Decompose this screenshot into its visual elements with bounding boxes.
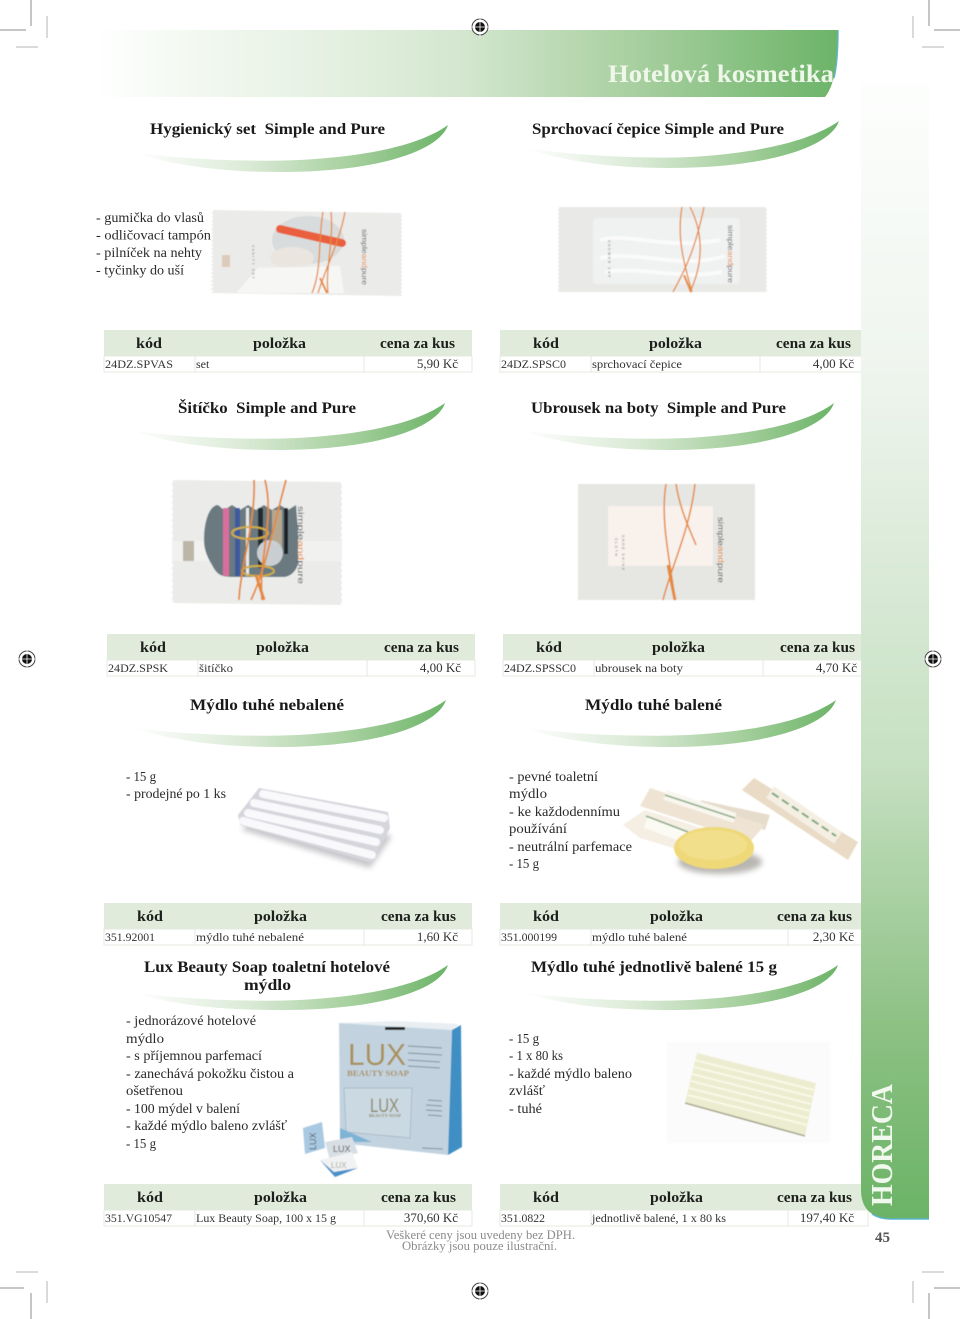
description list: - pilníček na nehty [96,246,202,261]
product photo: shower cap sachet: SHOWER CAP [607,240,611,279]
section: Mýdlo tuhé balené: Mýdlo tuhé balené [585,697,722,714]
product photo: LUX box and soaps: BEAUTY SOAP [369,1113,402,1118]
description list [509,1032,632,1117]
section: Lux Beauty Soap [126,959,462,1177]
section: Ubrousek na boty [520,400,834,600]
section: Mýdlo tuhé jednotlivě balené: Mýdlo tuhé jednotlivě balené 15 g [531,959,777,976]
table: 351.000199: položka [650,909,704,925]
table: 351.VG10547: cena za kus [381,1190,456,1206]
product photo: LUX box and soaps: LUX [331,1161,347,1170]
description list: mýdlo [126,1032,164,1047]
product photo: sewing kit sachet: simple and pure [296,506,305,585]
section: Mýdlo tuhé nebalené [126,697,446,868]
description list [126,1014,295,1152]
table: 351.92001: kód [137,909,164,925]
description list: - zanechává pokožku čistou a [126,1067,295,1082]
table: 351.000199: 351.000199 [501,930,557,944]
description list: - gumička do vlasů [96,211,204,226]
table: 24DZ.SPSK [107,634,475,676]
table: 24DZ.SPSC0: sprchovací čepice [592,357,682,371]
table: 351.92001: mýdlo tuhé nebalené [196,930,304,944]
table: 24DZ.SPSSC0: 4,70 Kč [816,660,857,675]
section: Sprchovací čepice [523,121,839,292]
table: 24DZ.SPSK: 24DZ.SPSK [108,661,168,675]
product photo: LUX box and soaps: LUX [348,1037,406,1072]
table: 351.0822: kód [533,1190,560,1206]
description list: - tuhé [509,1102,542,1117]
product photo: hygiene set sachet: simple and pure [360,229,367,285]
table: 351.0822: jednotlivě balené, 1 x 80 ks [591,1211,726,1225]
description list: - pevné toaletní [509,770,598,785]
description list: - každé mýdlo baleno [509,1067,632,1082]
table: 351.VG10547: kód [137,1190,164,1206]
table: 351.92001: 1,60 Kč [417,929,458,944]
table: 24DZ.SPSSC0: kód [536,640,563,656]
table: 24DZ.SPVAS: položka [253,336,307,352]
product photo: cream soap bar [667,1042,830,1143]
table: 24DZ.SPVAS: 5,90 Kč [417,356,458,371]
table: 351.0822: 351.0822 [501,1211,545,1225]
description list: - neutrální parfemace [509,840,632,855]
product photo: shoe cloth sachet: simple and pure [716,517,725,584]
table: 24DZ.SPVAS: cena za kus [380,336,455,352]
page header banner [96,30,838,97]
table: 351.000199: mýdlo tuhé balené [592,930,687,944]
table: 351.92001: položka [254,909,308,925]
table: 24DZ.SPSK: položka [256,640,310,656]
product photo: shower cap sachet [558,207,767,292]
section: Lux Beauty Soap: mýdlo [244,977,291,994]
product photo: wrapped soaps [623,778,858,874]
registration mark: right [923,649,943,669]
product photo: LUX box and soaps [303,1021,462,1177]
product photo: LUX box and soaps: LUX [333,1144,351,1154]
footnote: Veškeré ceny jsou uvedeny bez DPH. [386,1227,575,1242]
product photo: shoe cloth sachet [578,484,755,600]
footnote: Obrázky jsou pouze ilustrační. [402,1238,557,1253]
description list [126,770,226,802]
product photo: hygiene set sachet [211,210,402,296]
table: 24DZ.SPSSC0 [503,634,871,676]
product photo: sewing kit sachet [172,480,342,605]
section: Hygienický set [96,121,448,296]
sidebar tab: HORECA [861,82,929,1219]
section: Šitíčko [130,398,445,605]
description list: - s příjemnou parfemací [126,1049,262,1064]
table: 351.0822 [500,1184,868,1226]
table: 24DZ.SPSC0: položka [649,336,703,352]
description list: - 15 g [126,1137,156,1152]
table: 351.0822: položka [650,1190,704,1206]
description list [96,211,211,278]
table: 24DZ.SPSC0 [500,330,868,372]
table: 351.92001: cena za kus [381,909,456,925]
page title: Hotelová kosmetika [608,61,835,88]
section: Mýdlo tuhé jednotlivě balené [509,959,838,1143]
table: 351.000199: kód [533,909,560,925]
table: 24DZ.SPSC0: 24DZ.SPSC0 [501,357,566,371]
registration mark: bottom [470,1281,490,1301]
table: 24DZ.SPSC0: 4,00 Kč [813,356,854,371]
description list: používání [509,822,567,837]
description list: - každé mýdlo baleno zvlášť [126,1119,287,1134]
table: 24DZ.SPVAS: kód [136,336,163,352]
description list: - 15 g [509,857,539,872]
description list: - jednorázové hotelové [126,1014,256,1029]
sidebar tab: HORECA: HORECA [864,1083,899,1206]
table: 351.0822: 197,40 Kč [800,1210,854,1225]
table: 24DZ.SPSK: šitíčko [199,661,233,675]
table: 351.000199: 2,30 Kč [813,929,854,944]
table: 24DZ.SPSSC0: cena za kus [780,640,855,656]
product photo: shoe cloth sachet: SHOE SHINE [621,535,625,572]
registration mark: left [17,649,37,669]
table: 24DZ.SPSC0: cena za kus [776,336,851,352]
table: 351.92001: 351.92001 [105,930,155,944]
section: Mýdlo tuhé nebalené: Mýdlo tuhé nebalené [190,697,344,714]
product photo: LUX box and soaps: LUX [308,1132,318,1150]
description list: - 100 mýdel v balení [126,1102,240,1117]
page number: 45 [875,1230,890,1246]
table: 24DZ.SPVAS [104,330,472,372]
section: Hygienický set: Hygienický set Simple and Pure [150,121,385,138]
table: 351.0822: cena za kus [777,1190,852,1206]
description list: - tyčinky do uší [96,264,184,278]
table: 351.92001 [104,903,472,945]
description list: ošetřenou [126,1084,183,1099]
table: 24DZ.SPSC0: kód [533,336,560,352]
table: 24DZ.SPSK: cena za kus [384,640,459,656]
description list: - ke každodennímu [509,805,620,820]
description list [509,770,632,872]
product photo: shoe cloth sachet: CLOTH [614,538,618,557]
registration mark: top [470,17,490,37]
table: 351.VG10547: 370,60 Kč [404,1210,458,1225]
description list: mýdlo [509,787,547,802]
section: Ubrousek na boty: Ubrousek na boty Simple and Pure [531,400,786,417]
description list: zvlášť [509,1084,545,1099]
section: Mýdlo tuhé balené [509,697,858,874]
table: 24DZ.SPSSC0: 24DZ.SPSSC0 [504,661,576,675]
table: 24DZ.SPVAS: set [196,357,210,371]
product photo: shower cap sachet: simple and pure [726,225,733,283]
table: 24DZ.SPSK: kód [140,640,167,656]
description list: - 15 g [509,1032,539,1047]
section: Lux Beauty Soap: Lux Beauty Soap toaletní hotelové [144,959,390,976]
footnote [386,1227,575,1253]
table: 24DZ.SPVAS: 24DZ.SPVAS [105,357,173,371]
description list: - odličovací tampón [96,228,211,244]
product photo: LUX box and soaps: BEAUTY SOAP [347,1069,409,1078]
product photo: LUX box and soaps: LUX [370,1096,399,1117]
product photo: hygiene set sachet: VANITY SET [251,245,255,280]
description list: - prodejné po 1 ks [126,787,226,802]
description list: - 1 x 80 ks [509,1049,563,1064]
table: 351.000199 [500,903,868,945]
table: 351.000199: cena za kus [777,909,852,925]
section: Šitíčko: Šitíčko Simple and Pure [178,398,356,417]
table: 351.VG10547: 351.VG10547 [105,1211,172,1225]
product photo: white soap bar [238,788,392,868]
table: 24DZ.SPSSC0: položka [652,640,706,656]
table: 351.VG10547: položka [254,1190,308,1206]
table: 24DZ.SPSK: 4,00 Kč [420,660,461,675]
section: Sprchovací čepice: Sprchovací čepice Simple and Pure [532,121,784,138]
table: 351.VG10547: Lux Beauty Soap, 100 x 15 g [196,1211,336,1225]
table: 351.VG10547 [104,1184,472,1226]
description list: - 15 g [126,770,156,785]
table: 24DZ.SPSSC0: ubrousek na boty [595,661,683,675]
